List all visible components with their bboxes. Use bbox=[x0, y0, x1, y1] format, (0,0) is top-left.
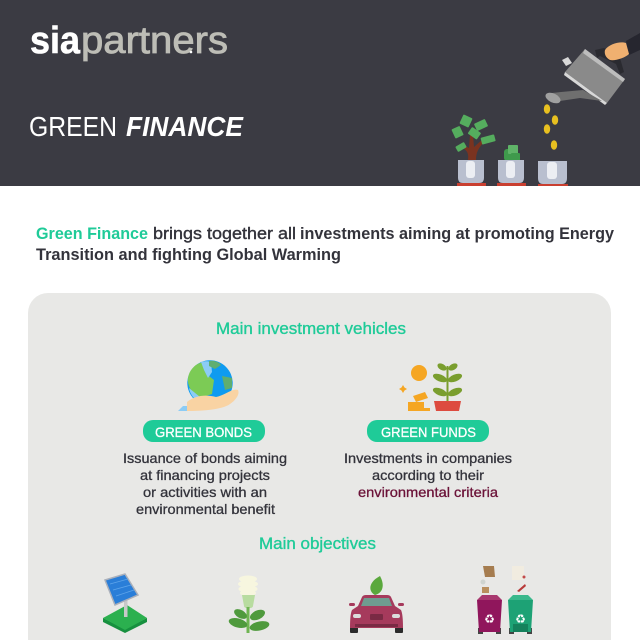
icon: solar panel bbox=[103, 574, 147, 633]
text: green bonds description: or activities with an bbox=[143, 484, 267, 500]
icon: recycling bins: ♻ bbox=[515, 612, 526, 626]
illustration: hand and watering can bbox=[544, 33, 640, 105]
badge: green funds: GREEN FUNDS bbox=[381, 424, 476, 440]
logo: sia partners: sia bbox=[30, 20, 81, 62]
text: green bonds description: at financing projects bbox=[140, 467, 270, 483]
illustration: falling coins bbox=[544, 104, 558, 150]
illustration: sprout of banknotes bbox=[504, 145, 520, 161]
icon: recycling bins: ♻ bbox=[484, 612, 495, 626]
heading: main investment vehicles: Main investment vehicles bbox=[216, 320, 406, 338]
header band bbox=[0, 0, 640, 186]
badge: green bonds: GREEN BONDS bbox=[155, 424, 252, 440]
illustration: money tree bbox=[451, 114, 496, 160]
badge: green bonds bbox=[143, 420, 265, 442]
title: FINANCE bbox=[126, 111, 244, 142]
intro text: Transition and fighting Global Warming bbox=[36, 245, 341, 264]
text: green funds description: environmental criteria bbox=[358, 484, 498, 500]
icon: eco light bulb plant bbox=[228, 576, 270, 633]
icon: recycling bins bbox=[477, 566, 533, 634]
icon: coins and plant bbox=[399, 362, 463, 411]
logo: sia partners: partners bbox=[81, 20, 228, 62]
intro text: investments aiming at promoting Energy bbox=[300, 224, 615, 243]
title bbox=[29, 111, 244, 142]
text: green funds description bbox=[344, 450, 512, 500]
text: green funds description: according to their bbox=[372, 467, 484, 483]
illustration: plant pots bbox=[457, 160, 568, 186]
icon: green electric car bbox=[349, 576, 404, 633]
heading: main objectives: Main objectives bbox=[259, 535, 376, 553]
intro text: Green Finance bbox=[36, 224, 148, 243]
badge: green funds bbox=[367, 420, 489, 442]
text: green bonds description bbox=[123, 450, 287, 517]
intro text: brings together all bbox=[153, 224, 296, 243]
text: green funds description: Investments in companies bbox=[344, 450, 512, 466]
text: green bonds description: Issuance of bonds aiming bbox=[123, 450, 287, 466]
panel: investment vehicles and objectives bbox=[28, 293, 611, 640]
text: green bonds description: environmental benefit bbox=[136, 501, 275, 517]
title: GREEN bbox=[29, 111, 117, 142]
intro text bbox=[36, 224, 615, 264]
icon: globe in hand bbox=[178, 360, 239, 411]
